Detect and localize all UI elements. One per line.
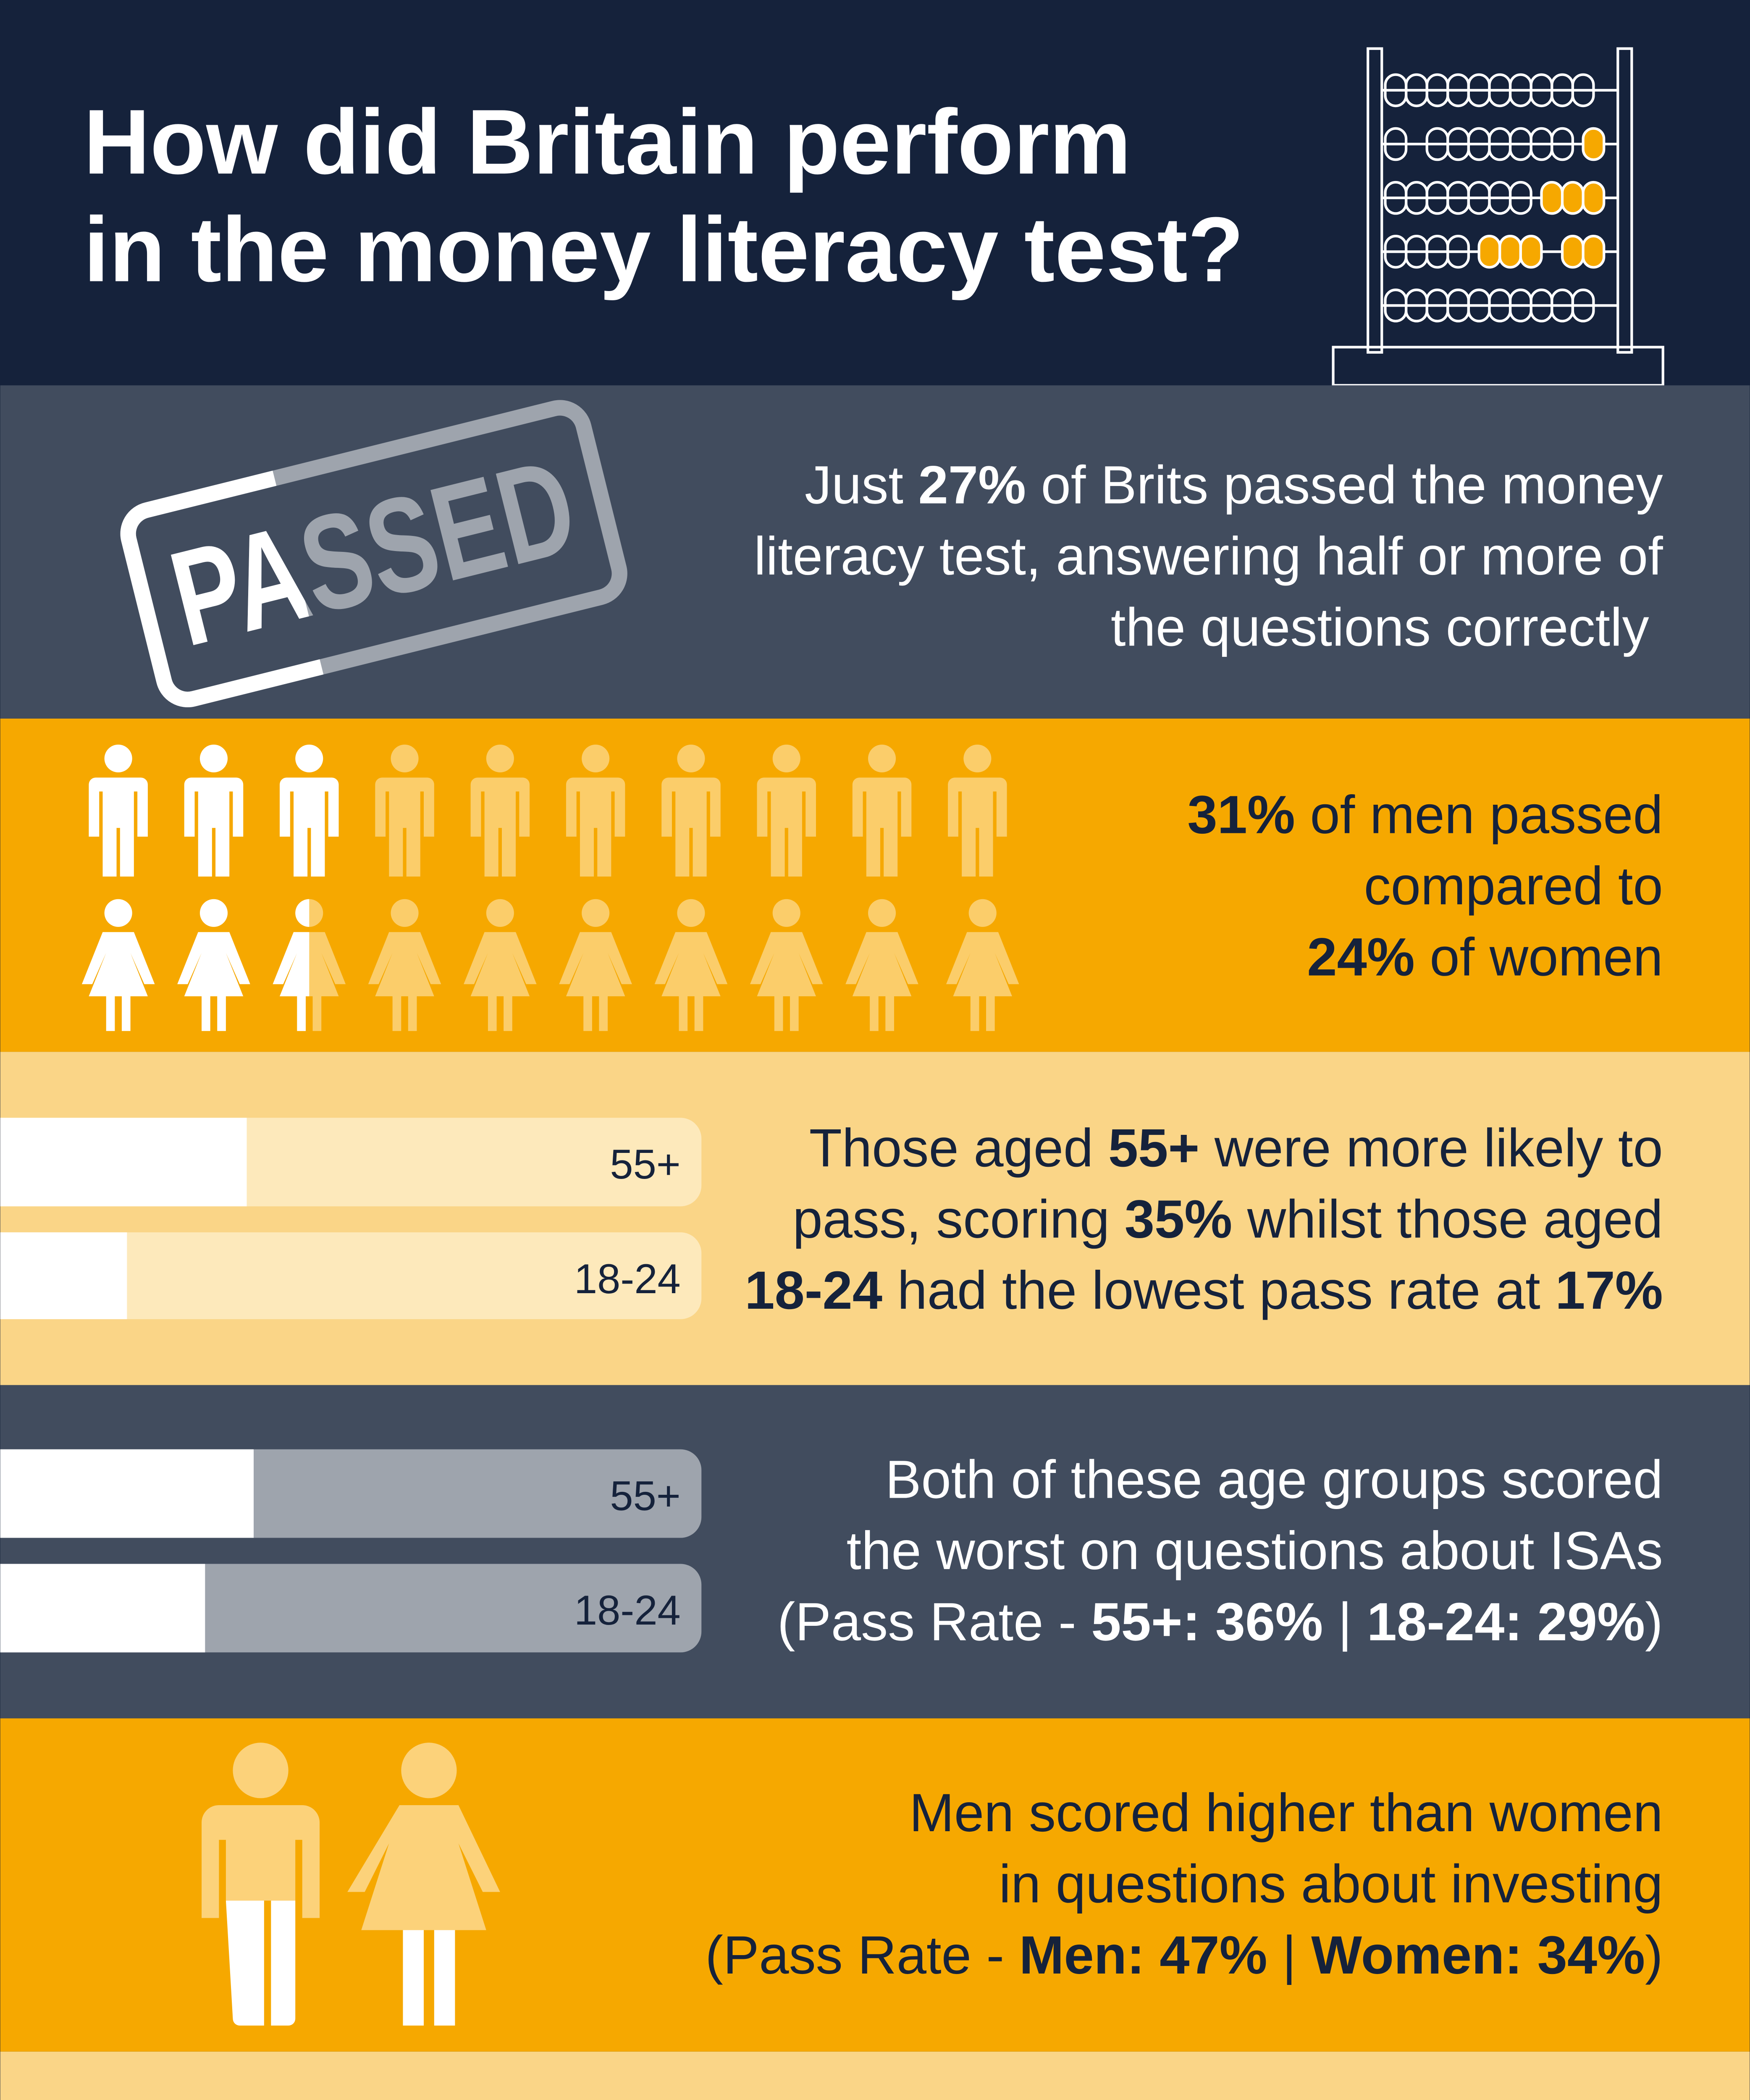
- icon: passed stamp: PASSED: [157, 430, 590, 675]
- title: How did Britain perform: [84, 91, 1131, 193]
- text: ISAs by age: Both of these age groups scored: [885, 1449, 1663, 1509]
- bar chart: age pass rates: 55+: [610, 1141, 681, 1188]
- bar chart: age pass rates: 18-24: [574, 1256, 681, 1302]
- icon: passed stamp: [123, 403, 624, 705]
- text: men vs women: 31% of men passed: [1187, 785, 1663, 845]
- panel: women ISAs: [0, 2052, 1750, 2100]
- icon: man and woman: [202, 1743, 500, 2026]
- text: passed: literacy test, answering half or more of: [754, 526, 1663, 586]
- text: passed: the questions correctly: [1111, 597, 1649, 657]
- text: age pass rates: Those aged 55+ were more likely to: [809, 1118, 1663, 1178]
- icon row: men: [89, 745, 1007, 877]
- bar chart: ISAs by age: [0, 1449, 701, 1652]
- text: investing: (Pass Rate - Men: 47% | Women: 34%): [705, 1925, 1663, 1985]
- panel: passed: [0, 385, 1750, 719]
- text: age pass rates: [745, 1118, 1663, 1320]
- text: ISAs by age: [777, 1449, 1663, 1652]
- text: investing: [705, 1783, 1663, 1985]
- icon: passed stamp: PASSED: [157, 430, 590, 675]
- text: ISAs by age: (Pass Rate - 55+: 36% | 18-24: 29%): [777, 1592, 1663, 1652]
- text: passed: Just 27% of Brits passed the money: [805, 455, 1663, 515]
- panel: men vs women: [0, 719, 1750, 1052]
- icon: abacus: [1333, 49, 1663, 385]
- bar chart: ISAs by age: 55+: [610, 1473, 681, 1519]
- panel: ISAs by age: [0, 1385, 1750, 1718]
- text: age pass rates: 18-24 had the lowest pass rate at 17%: [745, 1260, 1663, 1320]
- bar chart: ISAs by age: 18-24: [574, 1587, 681, 1634]
- icon row: women: [82, 899, 1019, 1031]
- text: ISAs by age: the worst on questions about ISAs: [847, 1521, 1663, 1581]
- text: investing: in questions about investing: [999, 1854, 1663, 1914]
- text: age pass rates: pass, scoring 35% whilst those aged: [792, 1189, 1663, 1250]
- bar chart: age pass rates: [0, 1118, 701, 1319]
- text: passed: [754, 455, 1663, 657]
- title: in the money literacy test?: [84, 198, 1244, 301]
- panel: header: [0, 0, 1750, 385]
- title: [84, 91, 1244, 301]
- text: investing: Men scored higher than women: [909, 1783, 1663, 1843]
- text: men vs women: 24% of women: [1307, 927, 1663, 987]
- text: men vs women: [1187, 785, 1663, 987]
- text: men vs women: compared to: [1364, 856, 1663, 916]
- panel: age pass rates: [0, 1052, 1750, 1385]
- panel: investing: [0, 1718, 1750, 2052]
